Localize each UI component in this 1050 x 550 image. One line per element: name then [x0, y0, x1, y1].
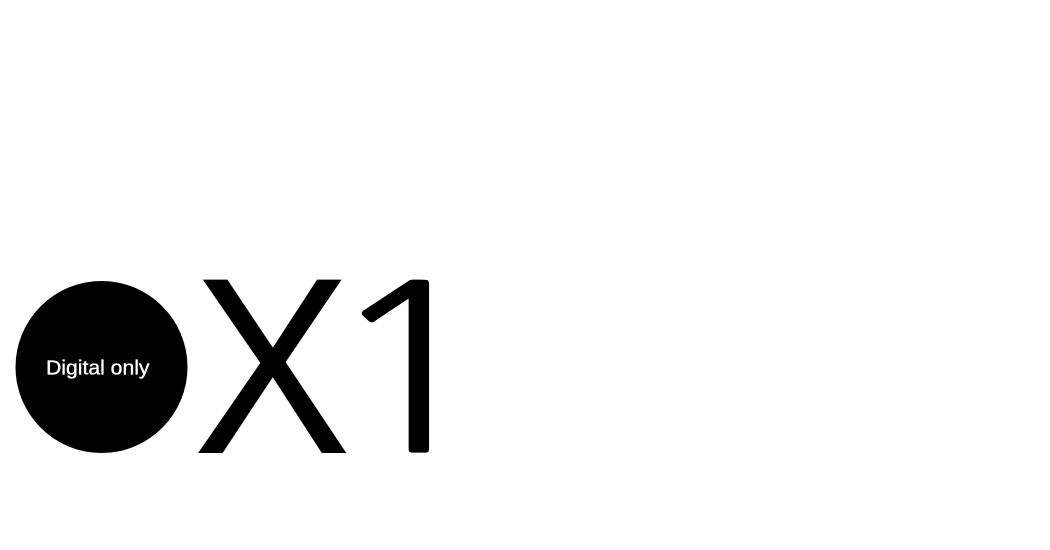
- badge: Digital only: Digital only: [46, 358, 150, 380]
- title: X1: X: [193, 225, 351, 507]
- title: X1: 1: [320, 254, 500, 486]
